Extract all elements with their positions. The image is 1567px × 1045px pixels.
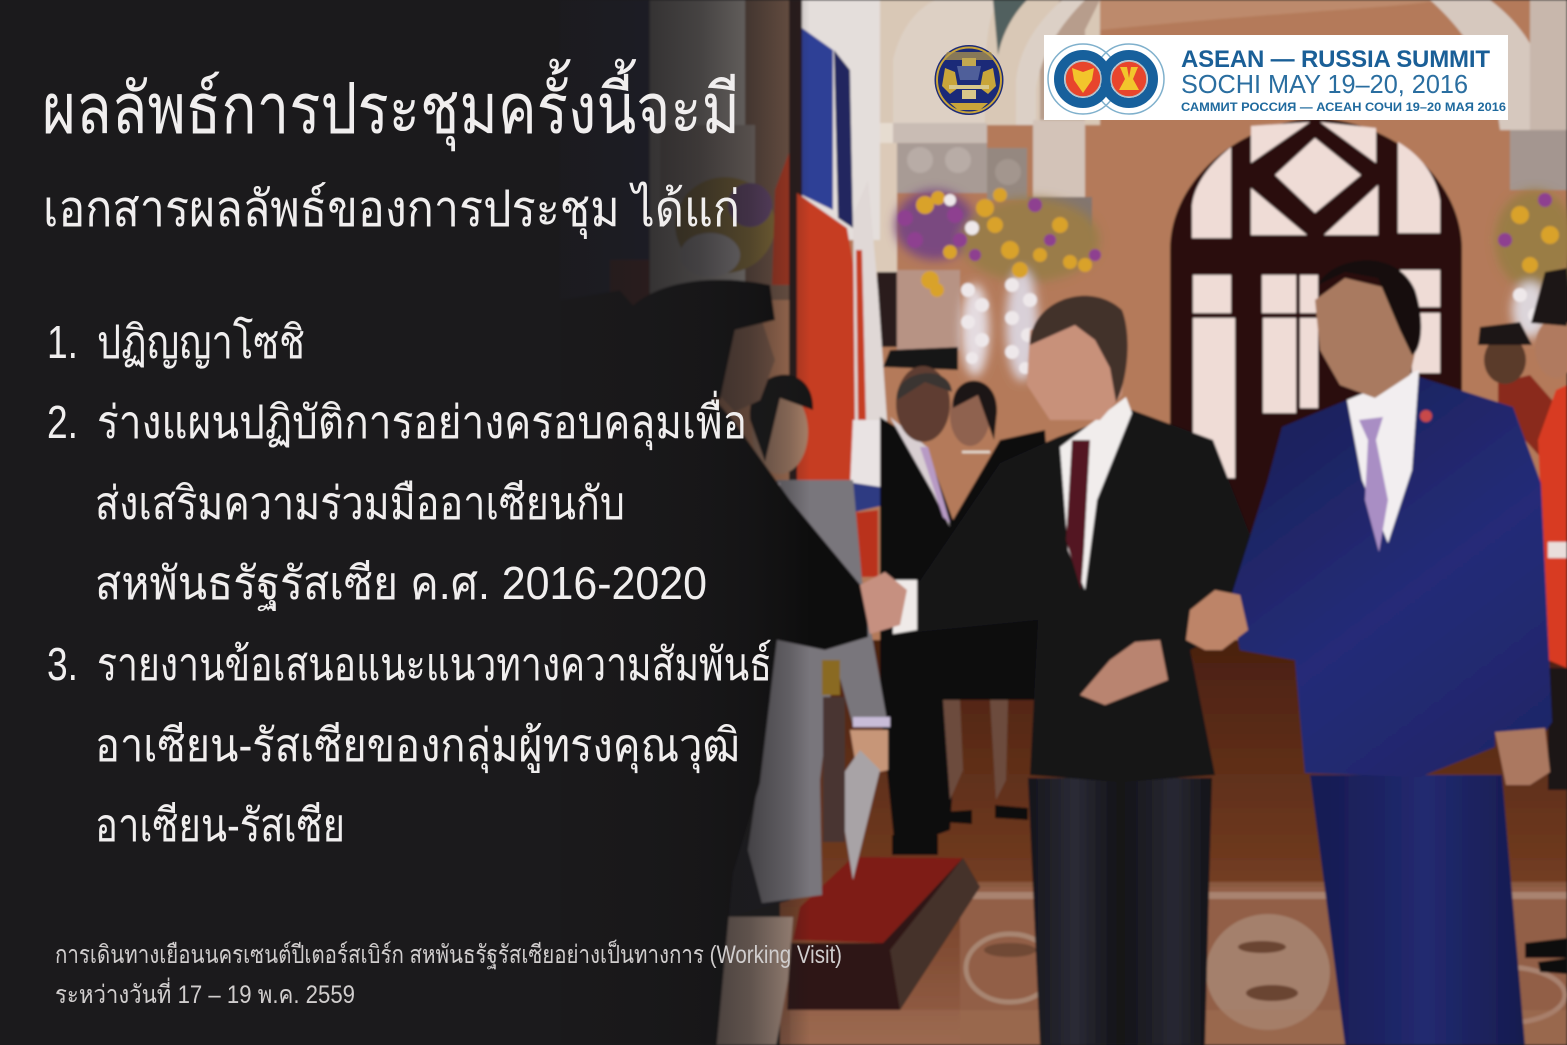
logo: ASEAN-Russia Summit: ASEAN — RUSSIA SUMMIT <box>1181 46 1490 73</box>
Prayut <box>1186 260 1552 1045</box>
wall <box>560 0 1567 660</box>
honour guards <box>1478 268 1567 974</box>
Medvedev <box>860 296 1260 1045</box>
floor <box>780 640 1567 1045</box>
dark guests behind <box>880 347 1060 855</box>
item 2: 2. <box>47 396 78 448</box>
logo rings <box>1048 44 1164 114</box>
list of outcome documents <box>47 316 772 851</box>
icon: Thai government seal <box>934 45 1004 115</box>
window <box>1170 118 1462 610</box>
stone archway <box>855 0 1567 350</box>
item 1 <box>47 316 305 368</box>
item 1: 1. <box>47 316 78 368</box>
item 3: รายงานข้อเสนอแนะแนวทางความสัมพันธ์ <box>97 638 772 690</box>
item 3: อาเซียน-รัสเซียของกลุ่มผู้ทรงคุณวุฒิ <box>95 719 740 774</box>
subtitle: เอกสารผลลัพธ์ของการประชุม ได้แก่ <box>43 181 740 239</box>
man shaking hands, left <box>560 280 868 1045</box>
carpet <box>790 882 1567 1045</box>
woman in grey suit <box>715 375 890 1045</box>
footer note: การเดินทางเยือนนครเซนต์ปีเตอร์สเบิร์ก สหพันธรัฐรัสเซียอย่างเป็นทางการ (Working Visit) <box>55 939 842 969</box>
item 3: 3. <box>47 638 78 690</box>
faded left wall and flags behind overlay <box>560 0 790 310</box>
red carpeted step <box>787 857 980 1010</box>
footer note: ระหว่างวันที่ 17 – 19 พ.ค. 2559 <box>55 977 355 1009</box>
logo: ASEAN-Russia Summit <box>1044 35 1508 120</box>
flower arrangements <box>895 188 1567 381</box>
item 3: อาเซียน-รัสเซีย <box>95 799 345 851</box>
item 2: ร่างแผนปฏิบัติการอย่างครอบคลุมเพื่อ <box>97 390 747 451</box>
title: ผลลัพธ์การประชุมครั้งนี้จะมี <box>42 58 740 152</box>
item 1: ปฏิญญาโซชิ <box>97 316 305 368</box>
item 2: สหพันธรัฐรัสเซีย ค.ศ. 2016-2020 <box>95 557 707 611</box>
flag <box>772 0 887 577</box>
item 3 <box>47 638 772 851</box>
logo: ASEAN-Russia Summit: SOCHI MAY 19–20, 2016 <box>1181 69 1468 99</box>
dark overlay panel <box>0 0 810 1045</box>
logo: ASEAN-Russia Summit: САММИТ РОССИЯ — АСЕАН СОЧИ 19–20 МАЯ 2016 <box>1181 102 1506 114</box>
item 2 <box>47 390 747 611</box>
footer note <box>55 939 842 1009</box>
item 2: ส่งเสริมความร่วมมืออาเซียนกับ <box>95 477 625 529</box>
